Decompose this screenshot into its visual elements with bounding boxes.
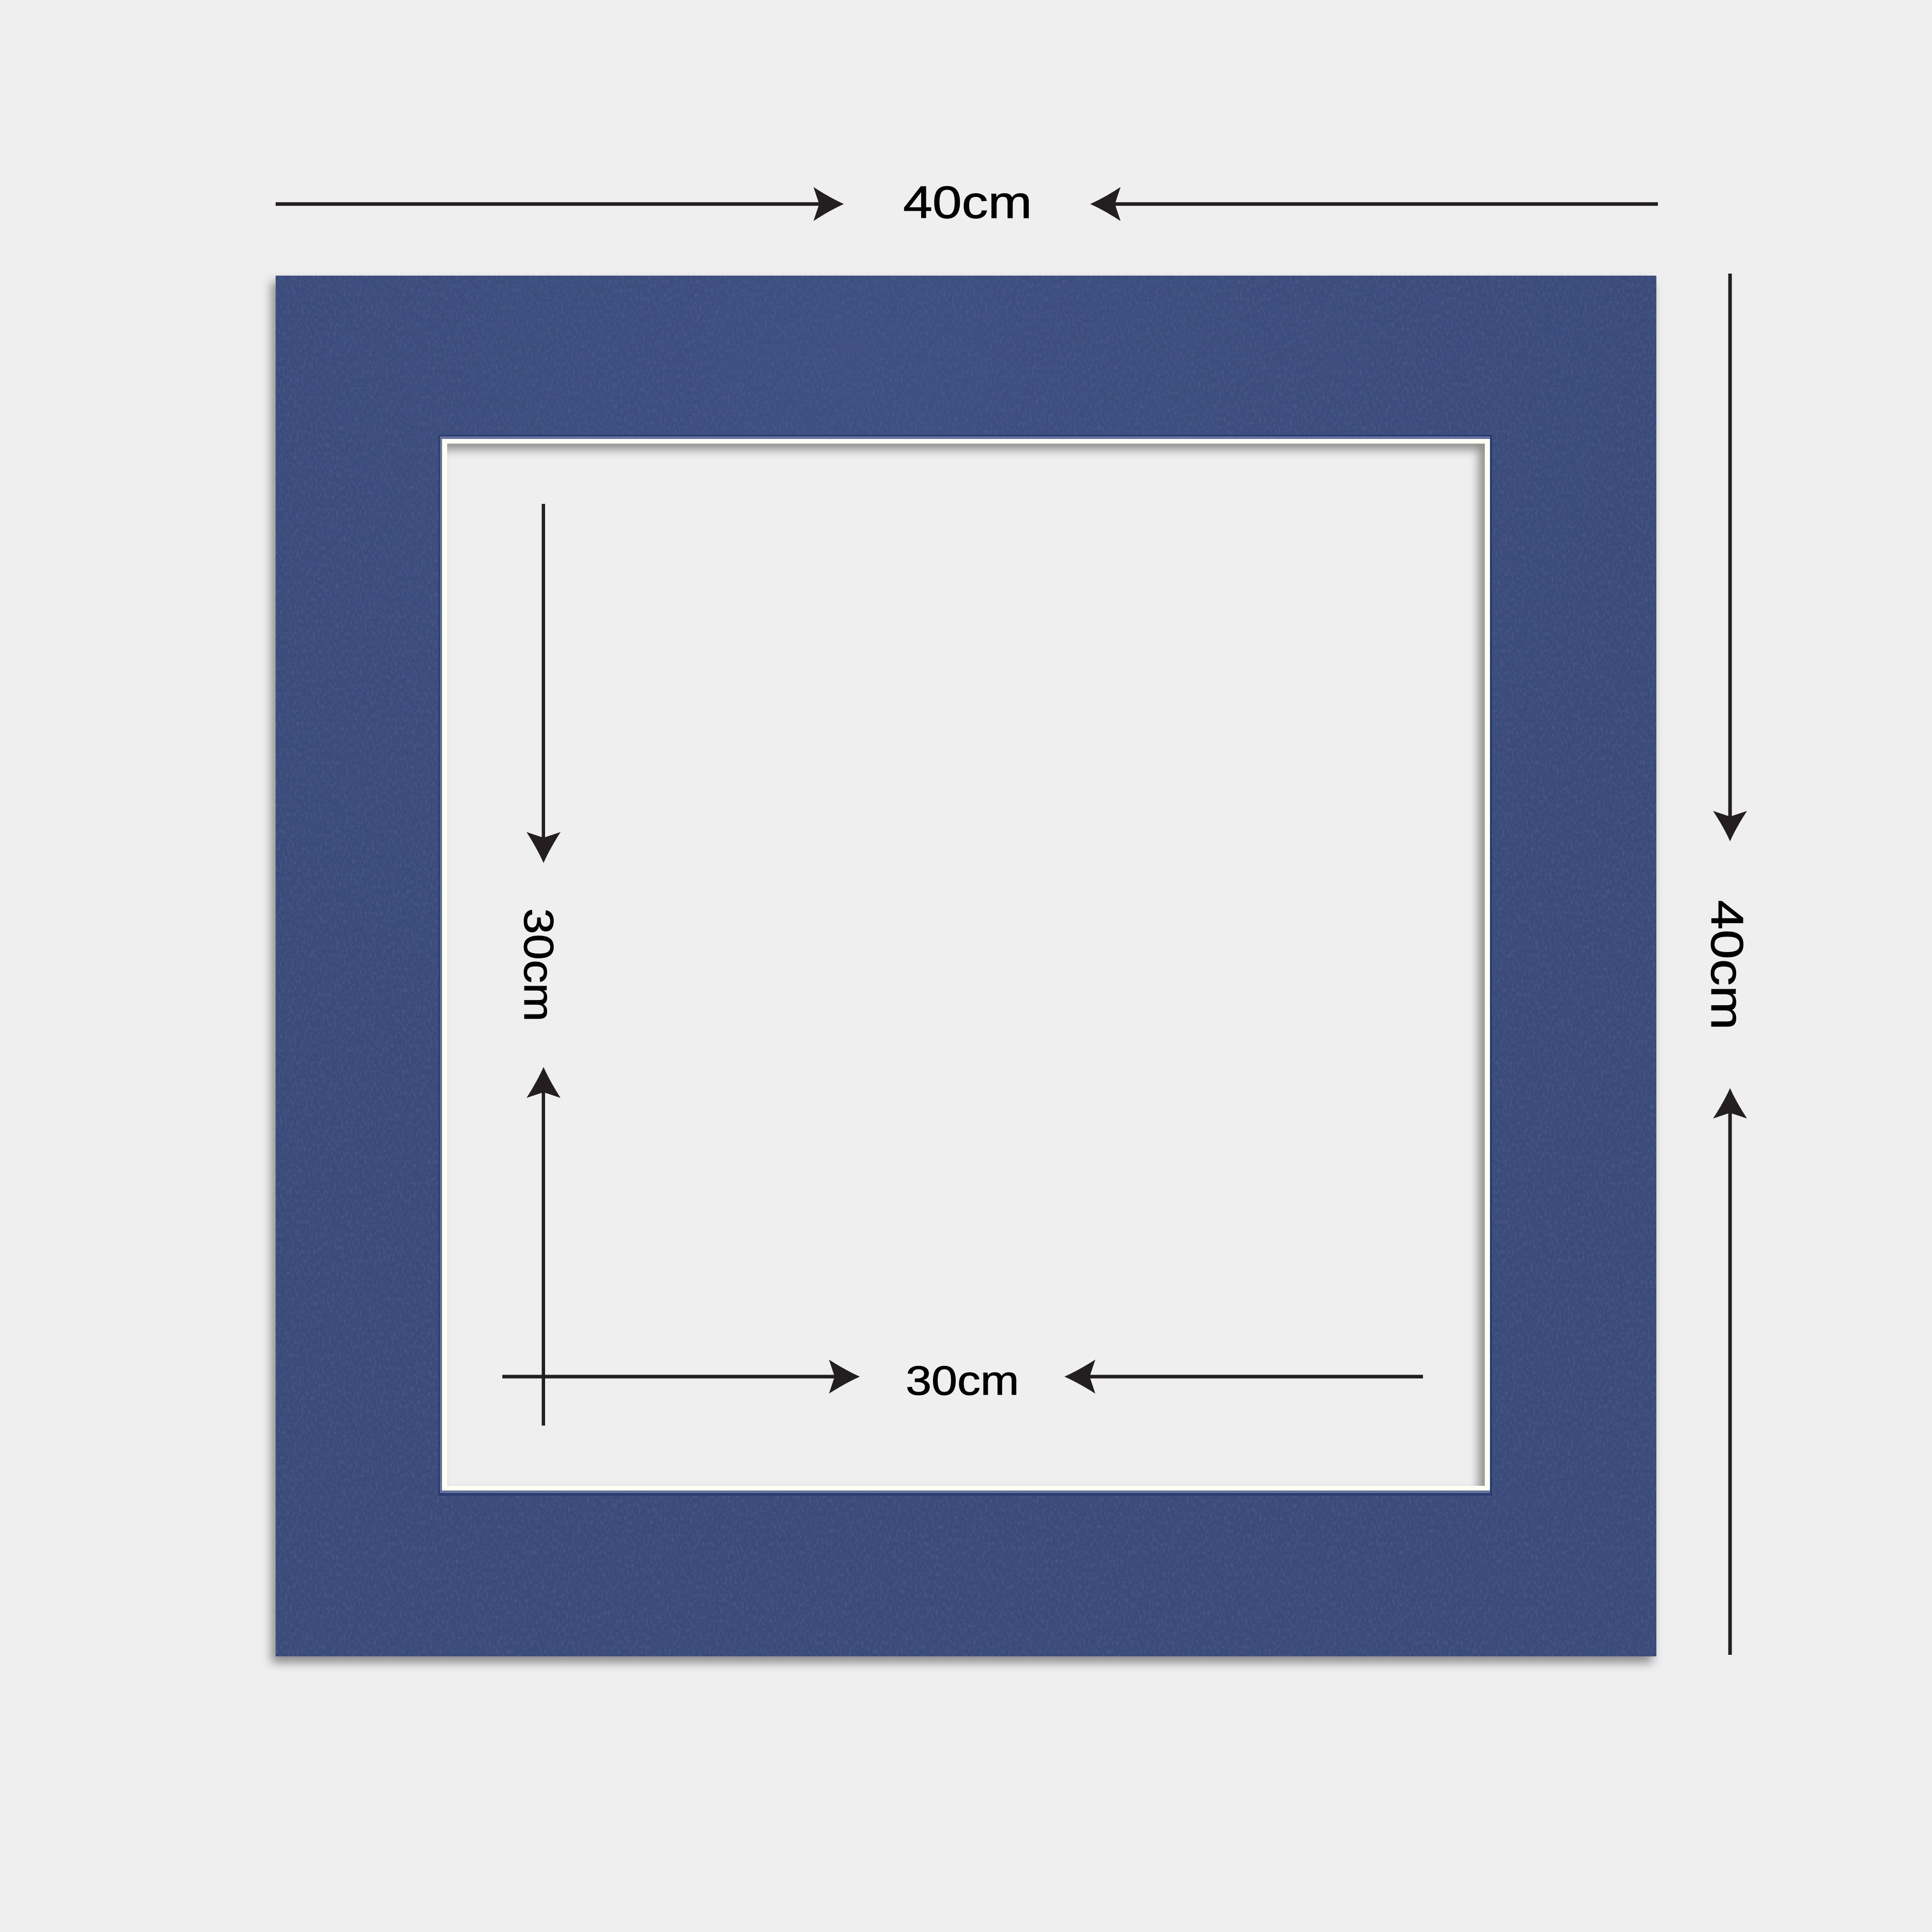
panel: blue mount board — [276, 276, 1656, 1656]
arrow: inner bottom left, window width — [502, 1360, 860, 1394]
cream bevel of the window — [442, 439, 1490, 1490]
arrow: top left, outer width — [276, 187, 844, 221]
label: outer height 40cm: 40cm — [1702, 900, 1753, 1030]
arrow: right upper, outer height — [1713, 274, 1747, 841]
arrow: inner left lower, window height — [527, 1067, 561, 1426]
window opening dark cut edge — [438, 435, 1492, 1496]
arrow: inner bottom right, window width — [1064, 1360, 1423, 1394]
arrow: inner left upper, window height — [527, 504, 561, 863]
arrow: top right, outer width — [1090, 187, 1658, 221]
label: window height 30cm: 30cm — [515, 908, 562, 1022]
window bevel highlight — [440, 436, 1490, 1493]
label: outer width 40cm: 40cm — [903, 177, 1032, 228]
arrow: right lower, outer height — [1713, 1088, 1747, 1655]
label: window width 30cm: 30cm — [906, 1358, 1019, 1403]
paper texture — [276, 276, 1656, 1656]
window opening with inner shadow — [447, 444, 1485, 1486]
